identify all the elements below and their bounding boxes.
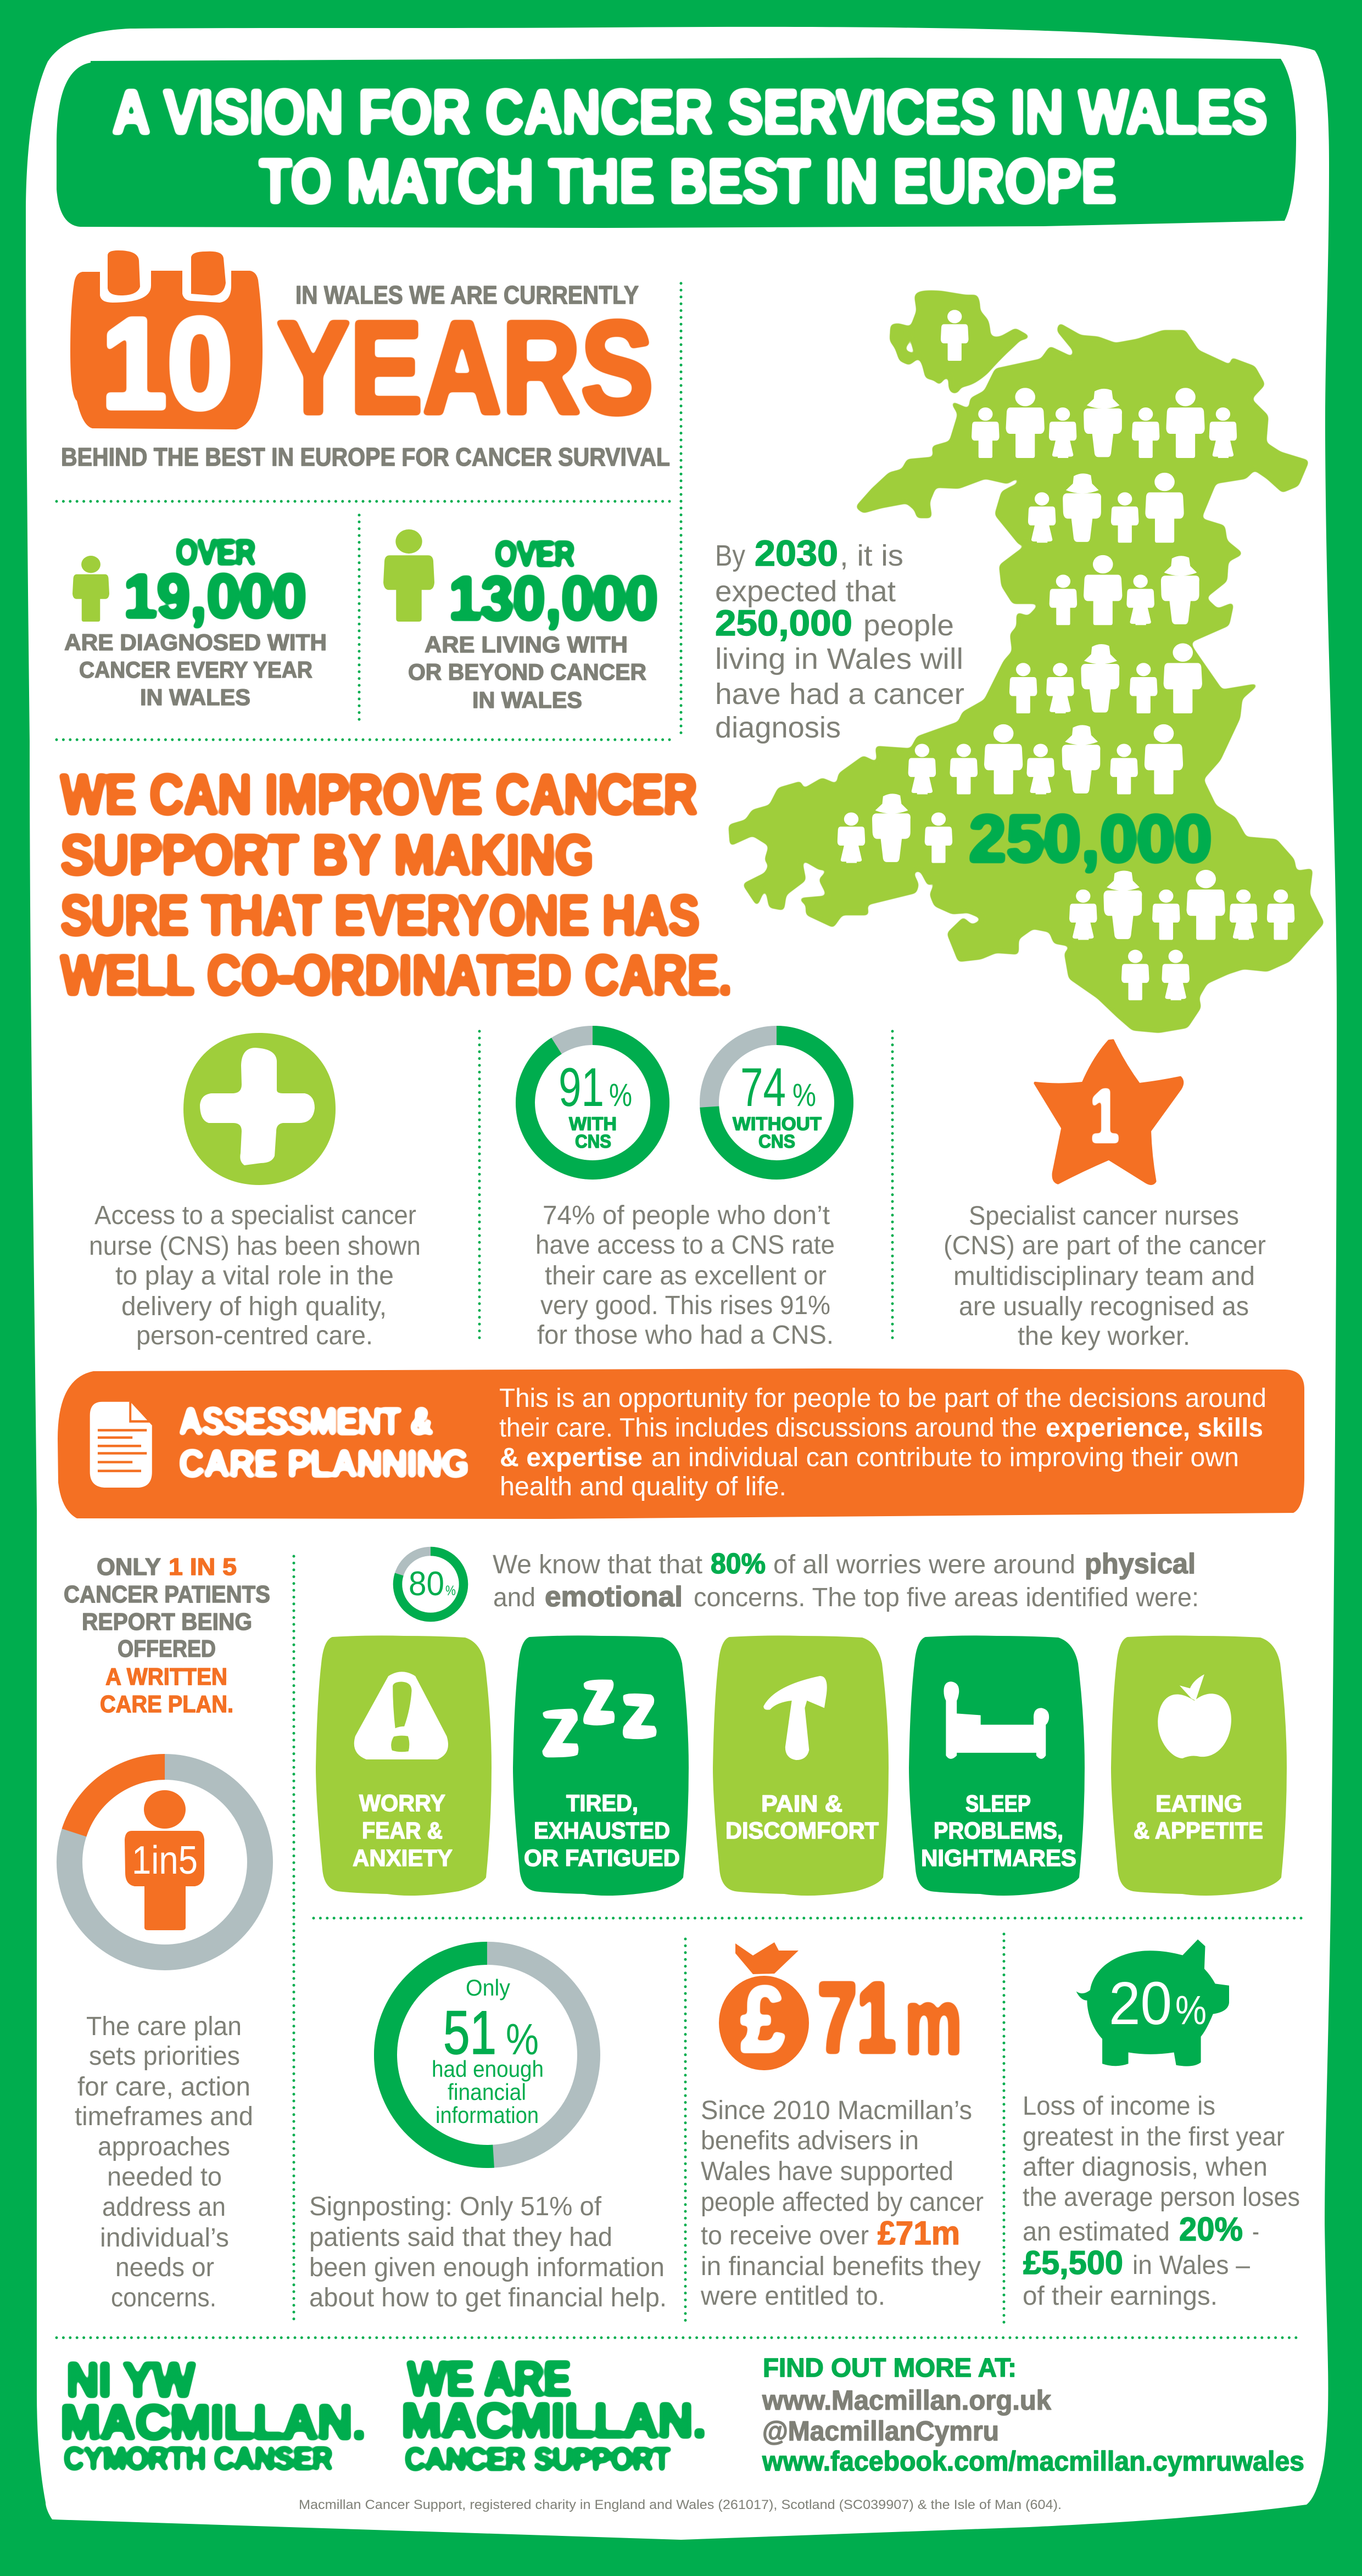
map number 250,000: 250,000 [969,801,1212,876]
card: eating [1111,1635,1287,1896]
logo: English Macmillan [401,2351,706,2477]
title: TO MATCH THE BEST IN EUROPE [259,147,1117,216]
label: TIRED, [566,1790,638,1817]
stat: 10 years behind [70,250,639,436]
text: only 1 in 5: A WRITTEN [105,1663,227,1690]
icon: apple [1158,1674,1231,1758]
number 19,000: 19,000 [124,562,306,630]
text: only 1 in 5 [64,1554,270,1718]
donut: 80% [398,1551,464,1617]
text block [1023,2092,1300,2311]
text block: Wales have supported [701,2157,953,2186]
donut: 80%: 80 [409,1565,444,1603]
panel: 1 in 5 care plan [44,1554,285,2312]
label: FEAR & [362,1818,443,1844]
banner: assessment and care planning [58,1368,1304,1519]
text: only 1 in 5: ONLY [97,1554,161,1580]
icon: calendar [70,250,263,436]
text block: the average person loses [1023,2183,1300,2212]
figure 71m: m [905,1970,962,2074]
panel: specialist nurse access [89,1033,421,1350]
label: DISCOMFORT [725,1818,879,1844]
donut: 51%: information [436,2102,539,2128]
text: in Wales we are currently: IN WALES WE ARE CURRENTLY [295,281,639,309]
text: behind the best: BEHIND THE BEST IN EUROPE FOR CANCER SURVIVAL [61,443,670,471]
label: SLEEP [965,1791,1031,1817]
text block: experience, skills [1046,1413,1263,1443]
text block: are usually recognised as [959,1292,1249,1321]
icon: star: 1 [1090,1072,1119,1159]
donut: 51% [379,1947,595,2163]
text block: in Wales – [1132,2251,1250,2280]
icon: bed [944,1681,1049,1759]
label: OR FATIGUED [524,1845,680,1871]
panel: signposting [309,1947,667,2312]
caption: CANCER EVERY YEAR [79,657,312,683]
text block: (CNS) are part of the cancer [944,1231,1266,1260]
donut: 74% without CNS: 74 [740,1057,786,1117]
text block: patients said that they had [309,2223,612,2252]
card: pain [713,1635,889,1896]
text block: individual’s [100,2223,229,2253]
label: ANXIETY [353,1845,453,1871]
logo: English Macmillan: CANCER SUPPORT [405,2441,671,2477]
text block: The care plan [86,2012,242,2041]
text block: of their earnings. [1023,2282,1218,2311]
text block: 74% of people who don’t [543,1201,830,1230]
text block: approaches [98,2132,230,2161]
heading: we can improve cancer support: WE CAN IMPROVE CANCER [60,763,697,826]
label over: OVER [176,532,256,572]
title banner [57,58,1296,228]
icon: piggy bank: % [1175,1987,1207,2033]
text block: sets priorities [89,2042,240,2071]
heading: CARE PLANNING [179,1442,469,1485]
donut: 51%: % [506,2015,539,2064]
text: only 1 in 5: REPORT BEING [82,1608,252,1635]
text block: about how to get financial help. [309,2283,667,2312]
text block: We know that that [493,1550,702,1579]
text block [944,1202,1266,1351]
text: by 2030: expected that [715,575,896,608]
text block: greatest in the first year [1023,2122,1285,2152]
text block: Access to a specialist cancer [94,1201,416,1230]
small print: Macmillan Cancer Support, registered charity in England and Wales (261017), Scotland (SC039907) & the Isle of Man (604). [299,2497,1062,2512]
donut: 74% without CNS: WITHOUT [733,1114,822,1135]
text block: been given enough information [309,2253,665,2282]
text block: emotional [545,1581,683,1613]
label: PAIN & [761,1791,842,1817]
text block: physical [1085,1548,1196,1580]
icon: piggy bank [1076,1940,1229,2066]
text block: 80% [711,1548,766,1580]
caption: OR BEYOND CANCER [408,659,646,685]
text block: very good. This rises 91% [540,1291,830,1320]
text: only 1 in 5: OFFERED [118,1635,216,1662]
panel: key worker [944,1041,1266,1351]
text block: needs or [115,2253,214,2282]
text block: after diagnosis, when [1023,2153,1268,2182]
text: by 2030: people [863,609,954,642]
icon: calendar: 10 [101,291,233,436]
label [524,1790,680,1871]
text block: £5,500 [1023,2244,1123,2281]
donut: 1 in 5: 1in5 [132,1839,198,1882]
heading: we can improve cancer support: SURE THAT EVERYONE HAS [60,884,700,947]
donut: 51%: Only [466,1975,510,2001]
icon: money bag [719,1942,809,2072]
text block: to receive over [701,2221,869,2250]
text block: were entitled to. [700,2282,885,2311]
panel: 80% of worries [398,1548,1199,1617]
label: NIGHTMARES [921,1845,1076,1871]
icon: star [1035,1041,1182,1183]
logo: Welsh Macmillan: MACMILLAN. [60,2395,366,2449]
donut: 91% with CNS: 91 [559,1057,604,1117]
text block: in financial benefits they [701,2252,981,2281]
icon: cross [183,1033,336,1185]
contact details [762,2354,1304,2477]
text block: nurse (CNS) has been shown [89,1232,421,1261]
heading: we can improve cancer support: WELL CO-ORDINATED CARE. [60,943,732,1007]
card: worry [316,1635,492,1896]
panel: £71m benefits [700,1942,984,2311]
text block: address an [102,2193,226,2222]
text block: their care as excellent or [545,1261,827,1290]
text block: This is an opportunity for people to be part of the decisions around [499,1384,1266,1413]
text block: to play a vital role in the [115,1261,394,1290]
text block [309,2192,667,2312]
icon: warning triangle [354,1672,448,1759]
caption [64,629,327,710]
text: by 2030: 2030 [755,533,838,573]
text block: and [493,1583,535,1612]
heading [179,1400,469,1485]
big word: years: YEARS [277,294,654,441]
people on the map [838,310,1294,1000]
caption [408,632,646,713]
text: by 2030: diagnosis [715,711,841,744]
text block: have access to a CNS rate [535,1231,835,1260]
donut: 91% with CNS: CNS [575,1131,611,1152]
donut: 91% with CNS: % [609,1077,632,1113]
text block: needed to [107,2163,222,2192]
text block: people affected by cancer [701,2188,984,2217]
text: only 1 in 5: 1 IN 5 [169,1554,237,1580]
text: by 2030: have had a cancer [715,678,964,711]
text block: health and quality of life. [500,1472,786,1501]
text: by 2030: 250,000 [715,602,852,643]
text block [535,1201,835,1350]
text block [700,2096,984,2311]
text block: 20% [1179,2211,1243,2248]
donut: 1 in 5 [44,1742,285,1982]
donut: 91% with CNS [525,1036,660,1170]
text block: Specialist cancer nurses [969,1202,1239,1231]
text: by 2030: living in Wales will [715,642,963,675]
text block [499,1384,1266,1501]
panel: 20% loss of income [1023,1940,1300,2311]
contact details: FIND OUT MORE AT: [763,2354,1017,2383]
label: PROBLEMS, [934,1818,1063,1844]
text block: concerns. The top five areas identified were: [694,1583,1199,1612]
label [725,1791,879,1844]
caption: IN WALES [140,684,250,710]
text block: & expertise [500,1443,643,1472]
figure 71m: 71 [818,1963,896,2073]
icon: money bag: £ [741,1968,785,2072]
label over: OVER [495,533,575,574]
donut: 74% without CNS: % [792,1077,816,1113]
label [353,1790,453,1871]
caption: ARE DIAGNOSED WITH [64,629,327,655]
text block: person-centred care. [136,1321,373,1350]
logo: Welsh Macmillan: CYMORTH CANSER [64,2441,333,2477]
text block [89,1201,421,1350]
text: only 1 in 5: CARE PLAN. [100,1691,233,1718]
stat: over 130,000 [383,529,658,713]
icon: zzz [542,1679,656,1757]
logo: English Macmillan: MACMILLAN. [401,2393,706,2448]
donut: 74% without CNS [710,1036,844,1170]
text block: an individual can contribute to improving their own [651,1443,1239,1472]
donut: 51%: financial [448,2079,526,2105]
title [112,77,1268,216]
card: tired [513,1635,689,1896]
contact details: www.facebook.com/macmillan.cymruwales [762,2446,1304,2477]
text block: - [1252,2217,1259,2247]
text block: an estimated [1023,2217,1170,2247]
heading: we can improve cancer support [60,763,732,1007]
text block: for those who had a CNS. [537,1321,834,1350]
text block: Since 2010 Macmillan’s [701,2096,972,2125]
donut: 51%: had enough [432,2056,544,2082]
label: EATING [1156,1791,1242,1817]
label: & APPETITE [1134,1818,1263,1844]
donut: 80%: % [445,1583,456,1599]
text: by 2030 [715,533,964,744]
heading: we can improve cancer support: SUPPORT BY MAKING [60,823,594,886]
label: WORRY [359,1790,445,1817]
contact details: @MacmillanCymru [762,2416,999,2446]
stat: over 19,000 [64,532,327,710]
donut: 91% with CNS: WITH [569,1114,617,1135]
caption: ARE LIVING WITH [425,632,628,657]
icon: person large [383,529,434,622]
logo: Welsh Macmillan [60,2353,366,2477]
text block: multidisciplinary team and [953,1262,1255,1291]
icon: document [90,1402,152,1488]
logo: Welsh Macmillan: NI YW [66,2353,195,2407]
label: EXHAUSTED [534,1818,670,1844]
text block: Signposting: Only 51% of [309,2192,602,2221]
text block: benefits advisers in [701,2126,919,2155]
panel: CNS ratings [525,1036,844,1350]
text block: delivery of high quality, [121,1292,387,1321]
icon: piggy bank: 20 [1109,1970,1172,2037]
icon: person small [72,556,109,622]
text block: for care, action [77,2072,250,2102]
heading: ASSESSMENT & [179,1400,433,1443]
donut: 51%: 51 [443,1998,496,2067]
icon: hammer [763,1676,827,1760]
text block [493,1548,1199,1613]
donut: 74% without CNS: CNS [758,1131,795,1152]
text block [75,2012,253,2312]
logo: English Macmillan: WE ARE [408,2351,571,2406]
text: by 2030: , it is [840,539,903,572]
text: by 2030: By [715,539,745,572]
card: sleep [909,1635,1085,1896]
map of Wales with people [730,292,1323,1032]
label [921,1791,1076,1871]
text block: timeframes and [75,2102,253,2131]
text block: the key worker. [1018,1322,1190,1351]
text block: their care. This includes discussions around the [499,1413,1037,1443]
text: only 1 in 5: CANCER PATIENTS [64,1581,270,1608]
text block: Loss of income is [1023,2092,1215,2121]
caption: IN WALES [472,687,582,713]
number 130,000: 130,000 [449,564,658,633]
text block: concerns. [111,2283,216,2312]
text block: of all worries were around [773,1550,1075,1579]
contact details: www.Macmillan.org.uk [762,2385,1051,2416]
label [1134,1791,1263,1844]
text block: £71m [878,2215,960,2251]
